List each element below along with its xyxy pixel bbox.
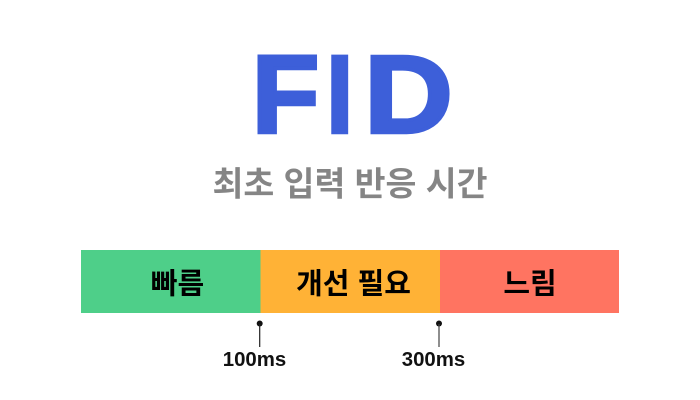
marker: 300ms: 300ms: [402, 349, 465, 371]
subtitle: 최초 입력 반응 시간: [212, 166, 488, 204]
segment: slow: 느림: [503, 268, 557, 300]
segment: needs improvement: 개선 필요: [296, 268, 411, 300]
marker: 100ms: 100ms: [223, 349, 286, 371]
marker: 300ms: [402, 320, 465, 371]
segment: fast: 빠름: [151, 268, 204, 300]
title: FID: I: [326, 32, 353, 156]
scale bar: [81, 250, 619, 313]
title: FID: [252, 32, 453, 156]
segment: slow: [440, 250, 619, 313]
title: FID: D: [364, 32, 453, 156]
title: FID: F: [252, 33, 319, 156]
marker: 100ms: [223, 320, 286, 371]
segment: fast: [81, 250, 260, 313]
segment: needs improvement: [260, 250, 440, 313]
